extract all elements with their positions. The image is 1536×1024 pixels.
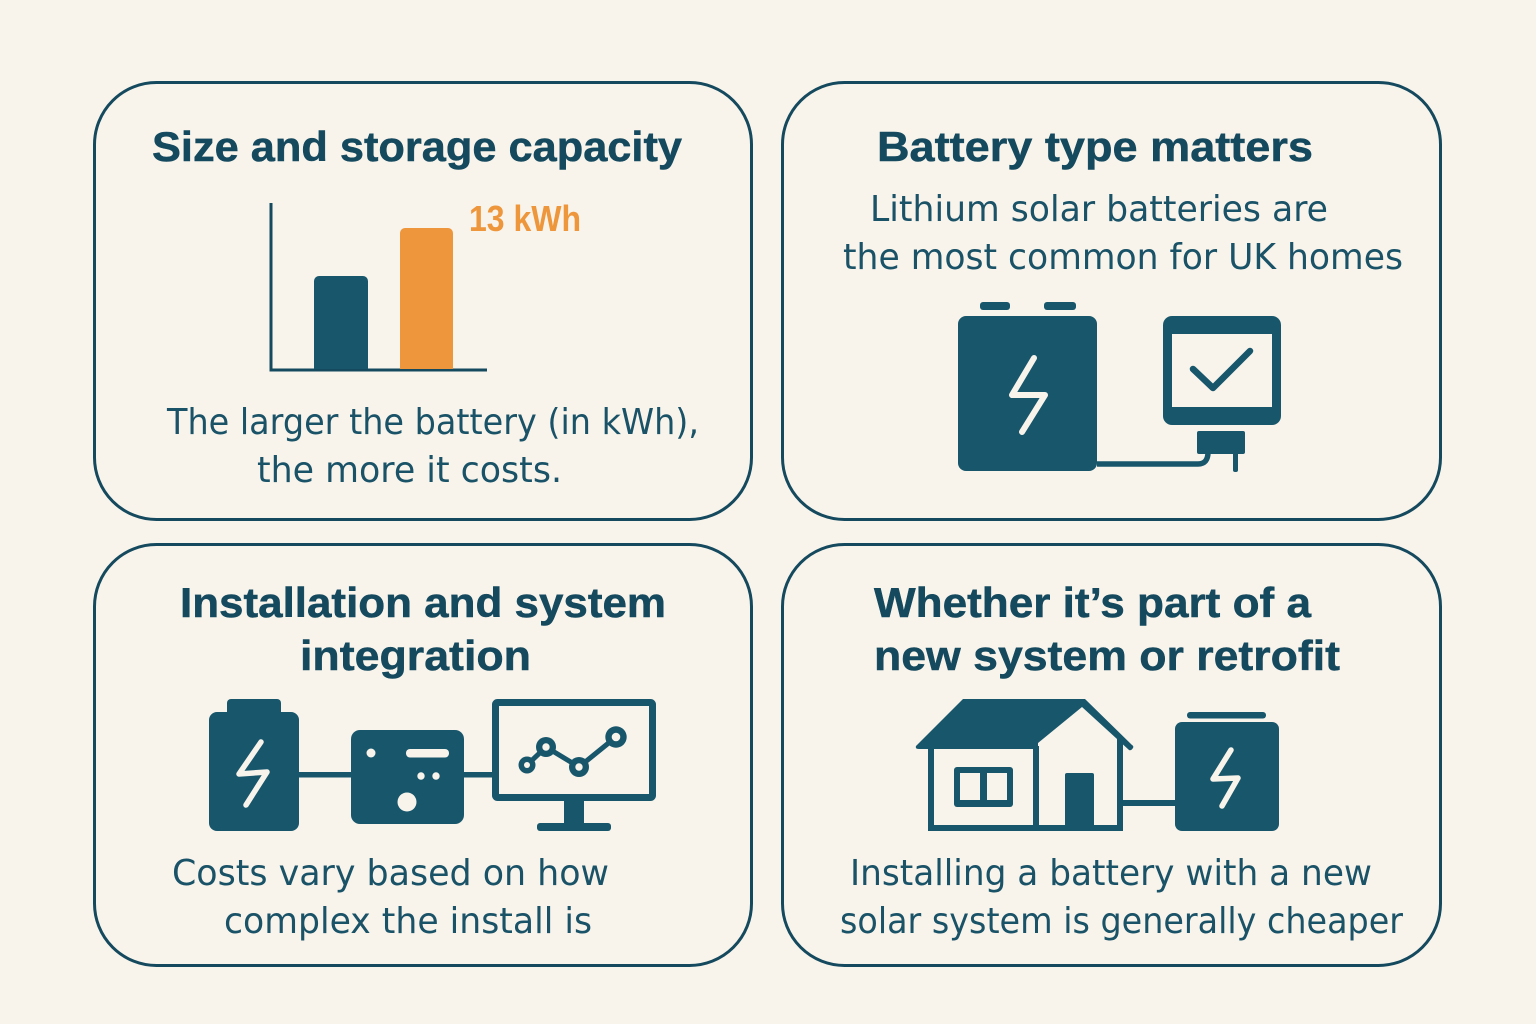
bar chart: 13 kWh <box>469 198 581 239</box>
text: battery size: the more it costs. <box>257 450 562 491</box>
bar chart <box>271 198 581 370</box>
panel: size and storage capacity <box>94 82 752 520</box>
heading: new system or retrofit: new system or retrofit <box>874 632 1340 679</box>
icon: battery connected to monitor <box>958 302 1281 472</box>
text: install complexity: complex the install is <box>224 901 592 942</box>
heading: installation and system integration: integration <box>300 632 531 679</box>
panel: installation and system integration <box>94 544 752 966</box>
text: new system cheaper: solar system is generally cheaper <box>840 901 1403 942</box>
heading: size and storage capacity: Size and storage capacity <box>152 123 683 170</box>
panel: new system or retrofit <box>782 544 1440 966</box>
text: install complexity: Costs vary based on how <box>172 853 609 894</box>
heading: battery type matters: Battery type matters <box>877 123 1313 170</box>
icon: house connected to battery <box>916 699 1279 831</box>
text: lithium batteries: the most common for UK homes <box>843 237 1403 278</box>
panel: battery type matters <box>782 82 1440 520</box>
text: lithium batteries: Lithium solar batteries are <box>870 189 1328 230</box>
icon: battery, inverter and monitor <box>209 699 652 831</box>
text: new system cheaper: Installing a battery with a new <box>850 853 1372 894</box>
heading: new system or retrofit: Whether it’s part of a <box>874 579 1312 626</box>
text: battery size: The larger the battery (in kWh), <box>166 402 699 443</box>
heading: installation and system integration: Installation and system <box>180 579 666 626</box>
